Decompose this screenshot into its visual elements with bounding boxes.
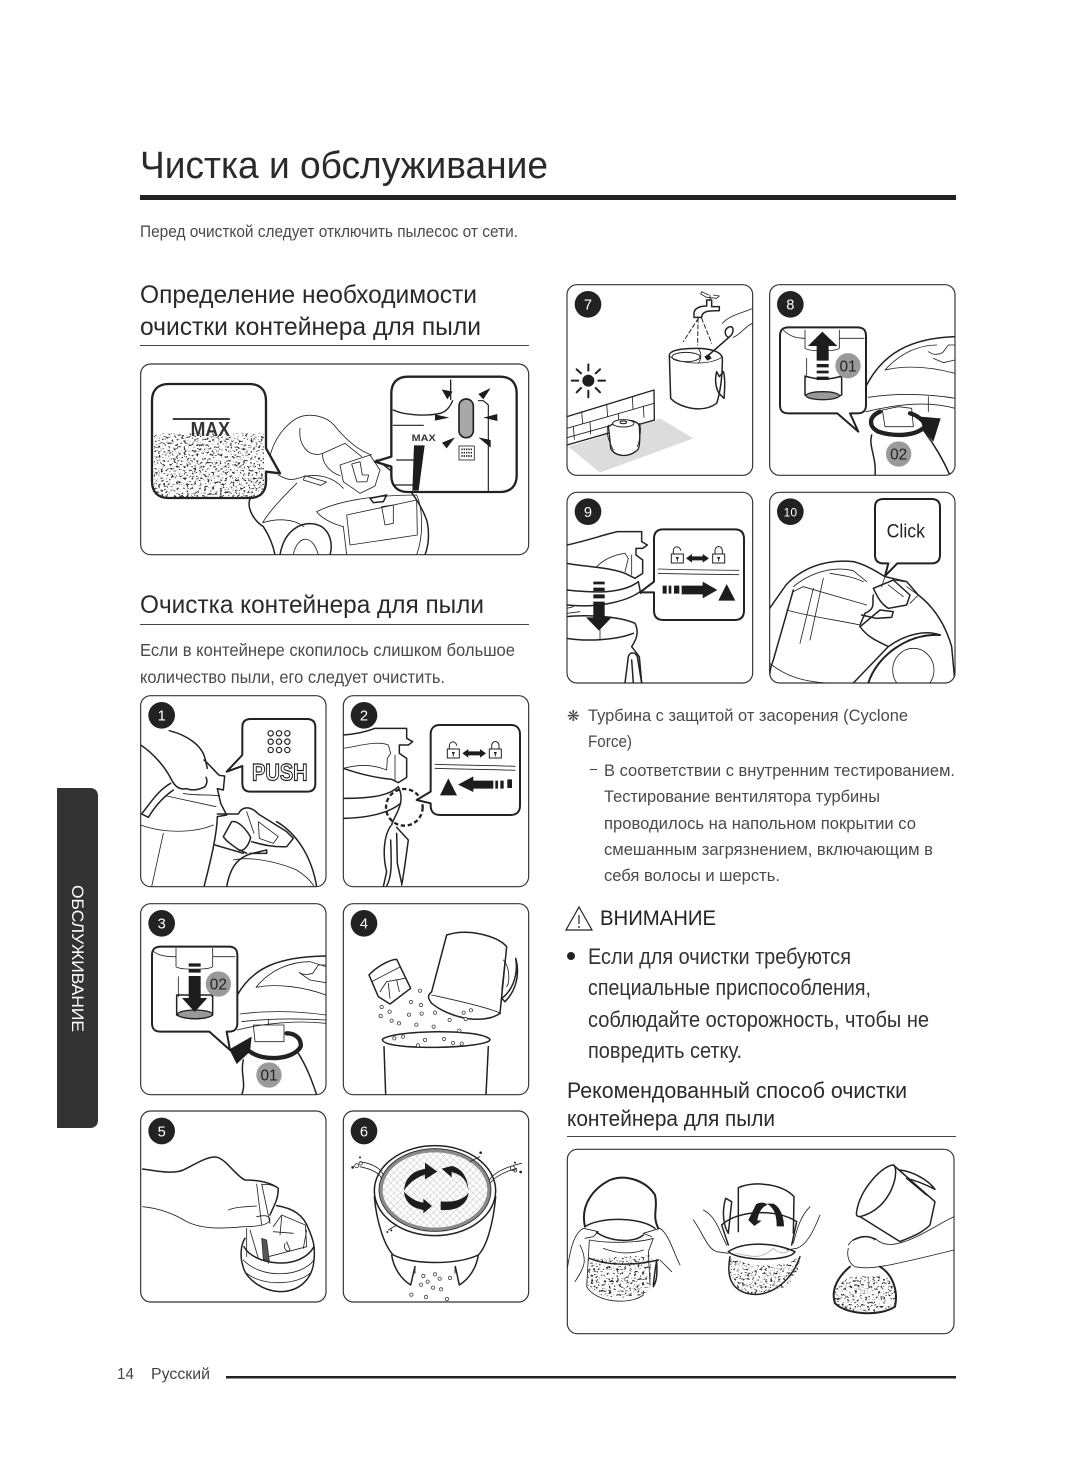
panel: step 5 [141, 1111, 326, 1302]
title rule [140, 195, 956, 200]
panel: step 9: 9 [584, 505, 592, 521]
panel: step 1: 1 [158, 709, 166, 725]
callout: remove filter: 02 [210, 977, 227, 994]
cleaning intro text: Если в контейнере скопилось слишком большое [140, 640, 515, 660]
panel: MAX level illustration [141, 364, 529, 555]
panel: step 3: 01 [260, 1068, 278, 1085]
steps 1 to 4 panels [141, 696, 529, 1095]
heading: cleaning the dust container: Очистка контейнера для пыли [140, 591, 484, 619]
callout: lock direction [640, 529, 744, 620]
note: Cyclone Force turbine: проводилось на напольном покрытии со [604, 815, 916, 833]
callout: MAX dust bubble: MAX [191, 419, 231, 441]
folding bag over container [693, 1184, 820, 1294]
pouring container into tied bag [834, 1165, 954, 1313]
footer page number and language: 14 [117, 1366, 134, 1383]
callout: remove filter [152, 947, 237, 1050]
note: Cyclone Force turbine: В соответствии с внутренним тестированием. [604, 762, 955, 780]
callout: Click: Click [887, 521, 925, 542]
panel: step 3 [141, 904, 326, 1095]
warning text: повредить сетку. [588, 1038, 742, 1063]
side tab: ОБСЛУЖИВАНИЕ [68, 885, 87, 1032]
warning heading: ВНИМАНИЕ [600, 907, 716, 930]
callout: reinstall filter: 01 [839, 358, 857, 375]
cleaning intro text [140, 640, 515, 687]
note: Cyclone Force turbine: Force) [588, 733, 632, 751]
bag over container [567, 1178, 680, 1301]
callout: PUSH [227, 719, 315, 792]
note: Cyclone Force turbine: себя волосы и шерсть. [604, 867, 780, 885]
warning text: соблюдайте осторожность, чтобы не [588, 1007, 929, 1032]
intro note: Перед очисткой следует отключить пылесос от сети. [140, 223, 518, 241]
note: Cyclone Force turbine: Турбина с защитой от засорения (Cyclone [588, 707, 908, 725]
panel: step 3: 3 [158, 917, 166, 933]
panel: step 5: 5 [158, 1124, 166, 1140]
callout: indicator bubble [375, 377, 517, 492]
heading: recommended cleaning method: контейнера для пыли [567, 1106, 775, 1131]
heading: recommended cleaning method [567, 1078, 956, 1137]
panel: step 2: 2 [360, 709, 368, 725]
steps 7 to 10 panels [567, 285, 955, 692]
warning text [567, 944, 929, 1063]
footer rule [226, 1376, 956, 1378]
panel: step 1 [141, 696, 326, 887]
heading: when to empty the dust container: очистки контейнера для пыли [140, 313, 481, 341]
panel: recommended method with bag [567, 1149, 954, 1334]
panel: step 10: 10 [784, 506, 797, 520]
footer page number and language [117, 1366, 210, 1383]
callout: indicator bubble: MAX [412, 433, 437, 443]
cleaning intro text: количество пыли, его следует очистить. [140, 667, 445, 687]
warning text: Если для очистки требуются [588, 944, 851, 969]
heading: recommended cleaning method: Рекомендованный способ очистки [567, 1078, 907, 1103]
callout: PUSH: PUSH [252, 760, 308, 787]
steps 5 and 6 panels [141, 1111, 529, 1302]
panel: step 7 [567, 285, 753, 475]
note: Cyclone Force turbine [567, 707, 955, 885]
panel: step 4 [343, 904, 529, 1095]
heading: when to empty the dust container [140, 281, 529, 346]
panel: step 4: 4 [360, 917, 368, 933]
panel: step 6 [343, 1111, 529, 1302]
panel: step 7: 7 [584, 298, 592, 314]
side tab [57, 788, 98, 1128]
title: Чистка и обслуживание [140, 145, 548, 187]
note: Cyclone Force turbine: Тестирование вентилятора турбины [604, 788, 880, 806]
callout: MAX dust bubble [152, 384, 280, 498]
note: Cyclone Force turbine: ❋ [567, 708, 580, 725]
panel: step 10 [770, 492, 955, 692]
panel: step 9 [567, 492, 753, 683]
footer page number and language: Русский [151, 1366, 210, 1383]
panel: step 8: 8 [786, 298, 794, 314]
callout: unlock direction [417, 725, 520, 815]
heading: when to empty the dust container: Определение необходимости [140, 281, 477, 309]
panel: step 8: 02 [890, 447, 907, 464]
warning text: специальные приспособления, [588, 975, 871, 1000]
note: Cyclone Force turbine: смешанным загрязнением, включающим в [604, 841, 933, 859]
callout: reinstall filter [780, 327, 866, 432]
panel: step 6: 6 [360, 1124, 368, 1140]
callout: Click [875, 499, 940, 576]
panel: step 8 [770, 285, 955, 475]
panel: step 2 [343, 696, 529, 887]
